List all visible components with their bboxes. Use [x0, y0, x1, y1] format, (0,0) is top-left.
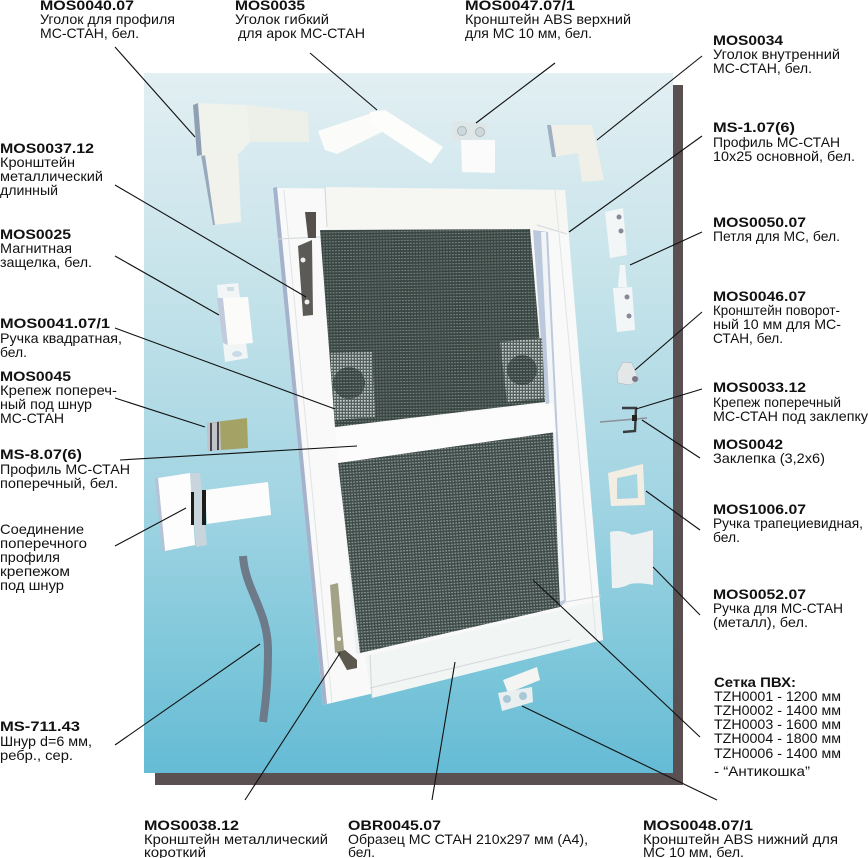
callout: MOS0038.12: Кронштейн металлический [144, 832, 328, 847]
icon: hinge MOS0050.07 [605, 208, 635, 332]
callout: MOS0035: Уголок гибкий [235, 12, 329, 27]
callout: MOS0041.07/1: бел. [0, 345, 27, 360]
callout: MOS0033.12: Крепеж поперечный [713, 395, 841, 410]
callout: MOS1006.07: бел. [713, 530, 740, 545]
icon: swivel bracket MOS0046.07 [617, 362, 639, 385]
callout: MOS0048.07/1: Кронштейн ABS нижний для [643, 832, 838, 847]
callout: MOS0048.07/1 [522, 706, 838, 858]
callout: MOS0042: Заклепка (3,2х6) [713, 451, 825, 466]
callout: MOS0041.07/1: Ручка квадратная, [0, 331, 122, 346]
callout: MOS0052.07: Ручка для МС-СТАН [713, 601, 843, 616]
callout: MOS0037.12: металлический [0, 169, 103, 184]
mesh upper [320, 229, 545, 427]
panel shadow [155, 85, 683, 785]
callout: MOS1006.07: Ручка трапециевидная, [713, 516, 863, 531]
mesh lower [338, 432, 560, 653]
callout: MOS0041.07/1: MOS0041.07/1 [0, 316, 111, 331]
callout: MOS0042 [642, 420, 825, 466]
callout: MOS0034: Уголок внутренний [713, 47, 840, 62]
icon: inner corner MOS0034 [547, 125, 604, 182]
icon: ABS bracket bottom MOS0048.07/1 [498, 667, 540, 711]
callout: MOS0052.07: MOS0052.07 [713, 587, 806, 602]
callout: MOS0050.07 [630, 215, 840, 265]
callout: MOS0040.07: Уголок для профиля [40, 12, 175, 27]
callout: MOS0042: MOS0042 [713, 437, 783, 452]
callout: MOS0045 [0, 369, 205, 427]
callout: MS-8.07(6): Профиль МС-СТАН [0, 462, 130, 477]
callout: MOS0046.07: ный 10 мм для МС- [713, 317, 841, 332]
callout: PVC mesh list: TZH0002 - 1400 мм [714, 703, 841, 718]
callout: MS-1.07(6) [569, 120, 855, 232]
callout: MOS0025: защелка, бел. [0, 255, 92, 270]
callout: MOS0047.07/1: Кронштейн ABS верхний [465, 12, 631, 27]
callout: MOS0040.07 [40, 0, 195, 137]
crossbar profile [335, 403, 556, 463]
background panel [144, 73, 673, 773]
callout: PVC mesh list: - “Антикошка” [714, 764, 811, 779]
callout: MS-1.07(6): Профиль МС-СТАН [713, 135, 840, 150]
icon: crossbar connection [155, 473, 271, 551]
callout: MOS0037.12: Кронштейн [0, 155, 75, 170]
callout: MOS0034: МС-СТАН, бел. [713, 61, 812, 76]
callout: crossbar connection: профиля [0, 550, 60, 565]
callout: PVC mesh list: TZH0006 - 1400 мм [714, 746, 841, 761]
callout: MS-711.43 [0, 644, 260, 763]
callout: MOS0046.07: Кронштейн поворот- [713, 303, 840, 318]
callout: MOS0047.07/1: для МС 10 мм, бел. [465, 26, 592, 41]
callout: MOS0050.07: Петля для МС, бел. [713, 229, 840, 244]
right mesh patch [500, 338, 545, 402]
callout: MOS0041.07/1 [0, 316, 335, 409]
callout: OBR0045.07: OBR0045.07 [348, 818, 441, 833]
callout: MOS0045: Крепеж попереч- [0, 383, 117, 398]
callout: MOS0047.07/1 [465, 0, 631, 123]
upper metal bracket [298, 212, 316, 316]
icon: cross fastener and rivet [600, 408, 647, 432]
callout: crossbar connection [0, 508, 186, 593]
callout: MOS0046.07 [635, 289, 841, 370]
callout: MOS0046.07: СТАН, бел. [713, 331, 783, 346]
icon: handle MOS0052.07 [610, 530, 653, 588]
callout: MS-8.07(6): MS-8.07(6) [0, 447, 82, 462]
callout: MOS0025: Магнитная [0, 241, 72, 256]
callout: crossbar connection: крепежом [0, 564, 70, 579]
callout: OBR0045.07: Образец МС СТАН 210х297 мм (А4), [348, 832, 588, 847]
callout: MOS0048.07/1: MOS0048.07/1 [643, 818, 754, 833]
callout: MOS0037.12: длинный [0, 183, 58, 198]
callout: MOS0050.07: MOS0050.07 [713, 215, 806, 230]
callout: MOS0038.12: MOS0038.12 [144, 818, 239, 833]
callout: MS-1.07(6): 10х25 основной, бел. [713, 149, 855, 164]
callout: PVC mesh list [533, 580, 841, 779]
callout: MOS0037.12: MOS0037.12 [0, 141, 94, 156]
callout: MOS1006.07 [646, 491, 863, 545]
callout: crossbar connection: поперечного [0, 536, 87, 551]
callout: MOS0045: МС-СТАН [0, 411, 64, 426]
callout: MOS0033.12: MOS0033.12 [713, 380, 806, 395]
callout: PVC mesh list: TZH0004 - 1800 мм [714, 731, 841, 746]
callout: MS-8.07(6): поперечный, бел. [0, 476, 118, 491]
callout: PVC mesh list: TZH0003 - 1600 мм [714, 717, 841, 732]
left mesh patch [330, 352, 375, 420]
callout: MOS0034 [597, 33, 840, 140]
callout: MS-1.07(6): MS-1.07(6) [713, 120, 795, 135]
icon: trapezoid handle MOS1006.07 [608, 464, 645, 506]
callout: MOS0025: MOS0025 [0, 227, 72, 242]
icon: magnetic latch MOS0025 [217, 283, 253, 362]
callout: MS-8.07(6) [0, 446, 357, 491]
callout: MOS0038.12 [144, 653, 340, 858]
callout: MOS0034: MOS0034 [713, 33, 784, 48]
icon: corner MOS0040 [193, 103, 309, 225]
callout: MOS0025 [0, 227, 219, 315]
callout: MOS0037.12 [0, 141, 306, 297]
callout: MOS0035: для арок МС-СТАН [238, 26, 365, 41]
icon: flexible corner MOS0035 [318, 110, 443, 164]
callout: OBR0045.07 [348, 662, 588, 858]
callout: MOS0045: MOS0045 [0, 369, 72, 384]
icon: ABS bracket top MOS0047.07/1 [452, 121, 495, 173]
callout: MOS0052.07 [653, 567, 843, 630]
callout: MOS1006.07: MOS1006.07 [713, 502, 806, 517]
callout: MOS0040.07: МС-СТАН, бел. [40, 26, 139, 41]
callout: crossbar connection: Соединение [0, 522, 84, 537]
icon: cross fastener MOS0045 [207, 418, 248, 451]
callout: MOS0033.12 [636, 380, 868, 424]
callout: PVC mesh list: TZH0001 - 1200 мм [714, 689, 841, 704]
icon: cord MS-711.43 [243, 556, 268, 722]
window frame sample [273, 187, 603, 705]
callout: MOS0035 [235, 0, 377, 110]
callout: MS-711.43: MS-711.43 [0, 719, 80, 734]
callout: MOS0046.07: MOS0046.07 [713, 289, 806, 304]
callout: MS-711.43: ребр., сер. [0, 748, 73, 763]
callout: MOS0052.07: (металл), бел. [713, 615, 808, 630]
callout: crossbar connection: под шнур [0, 578, 64, 593]
callout: PVC mesh list: Сетка ПВХ: [714, 675, 796, 690]
callout: MOS0033.12: МС-СТАН под заклепку [713, 409, 868, 424]
callout: MS-711.43: Шнур d=6 мм, [0, 734, 92, 749]
callout: MOS0045: ный под шнур [0, 397, 92, 412]
lower metal bracket [330, 583, 357, 670]
